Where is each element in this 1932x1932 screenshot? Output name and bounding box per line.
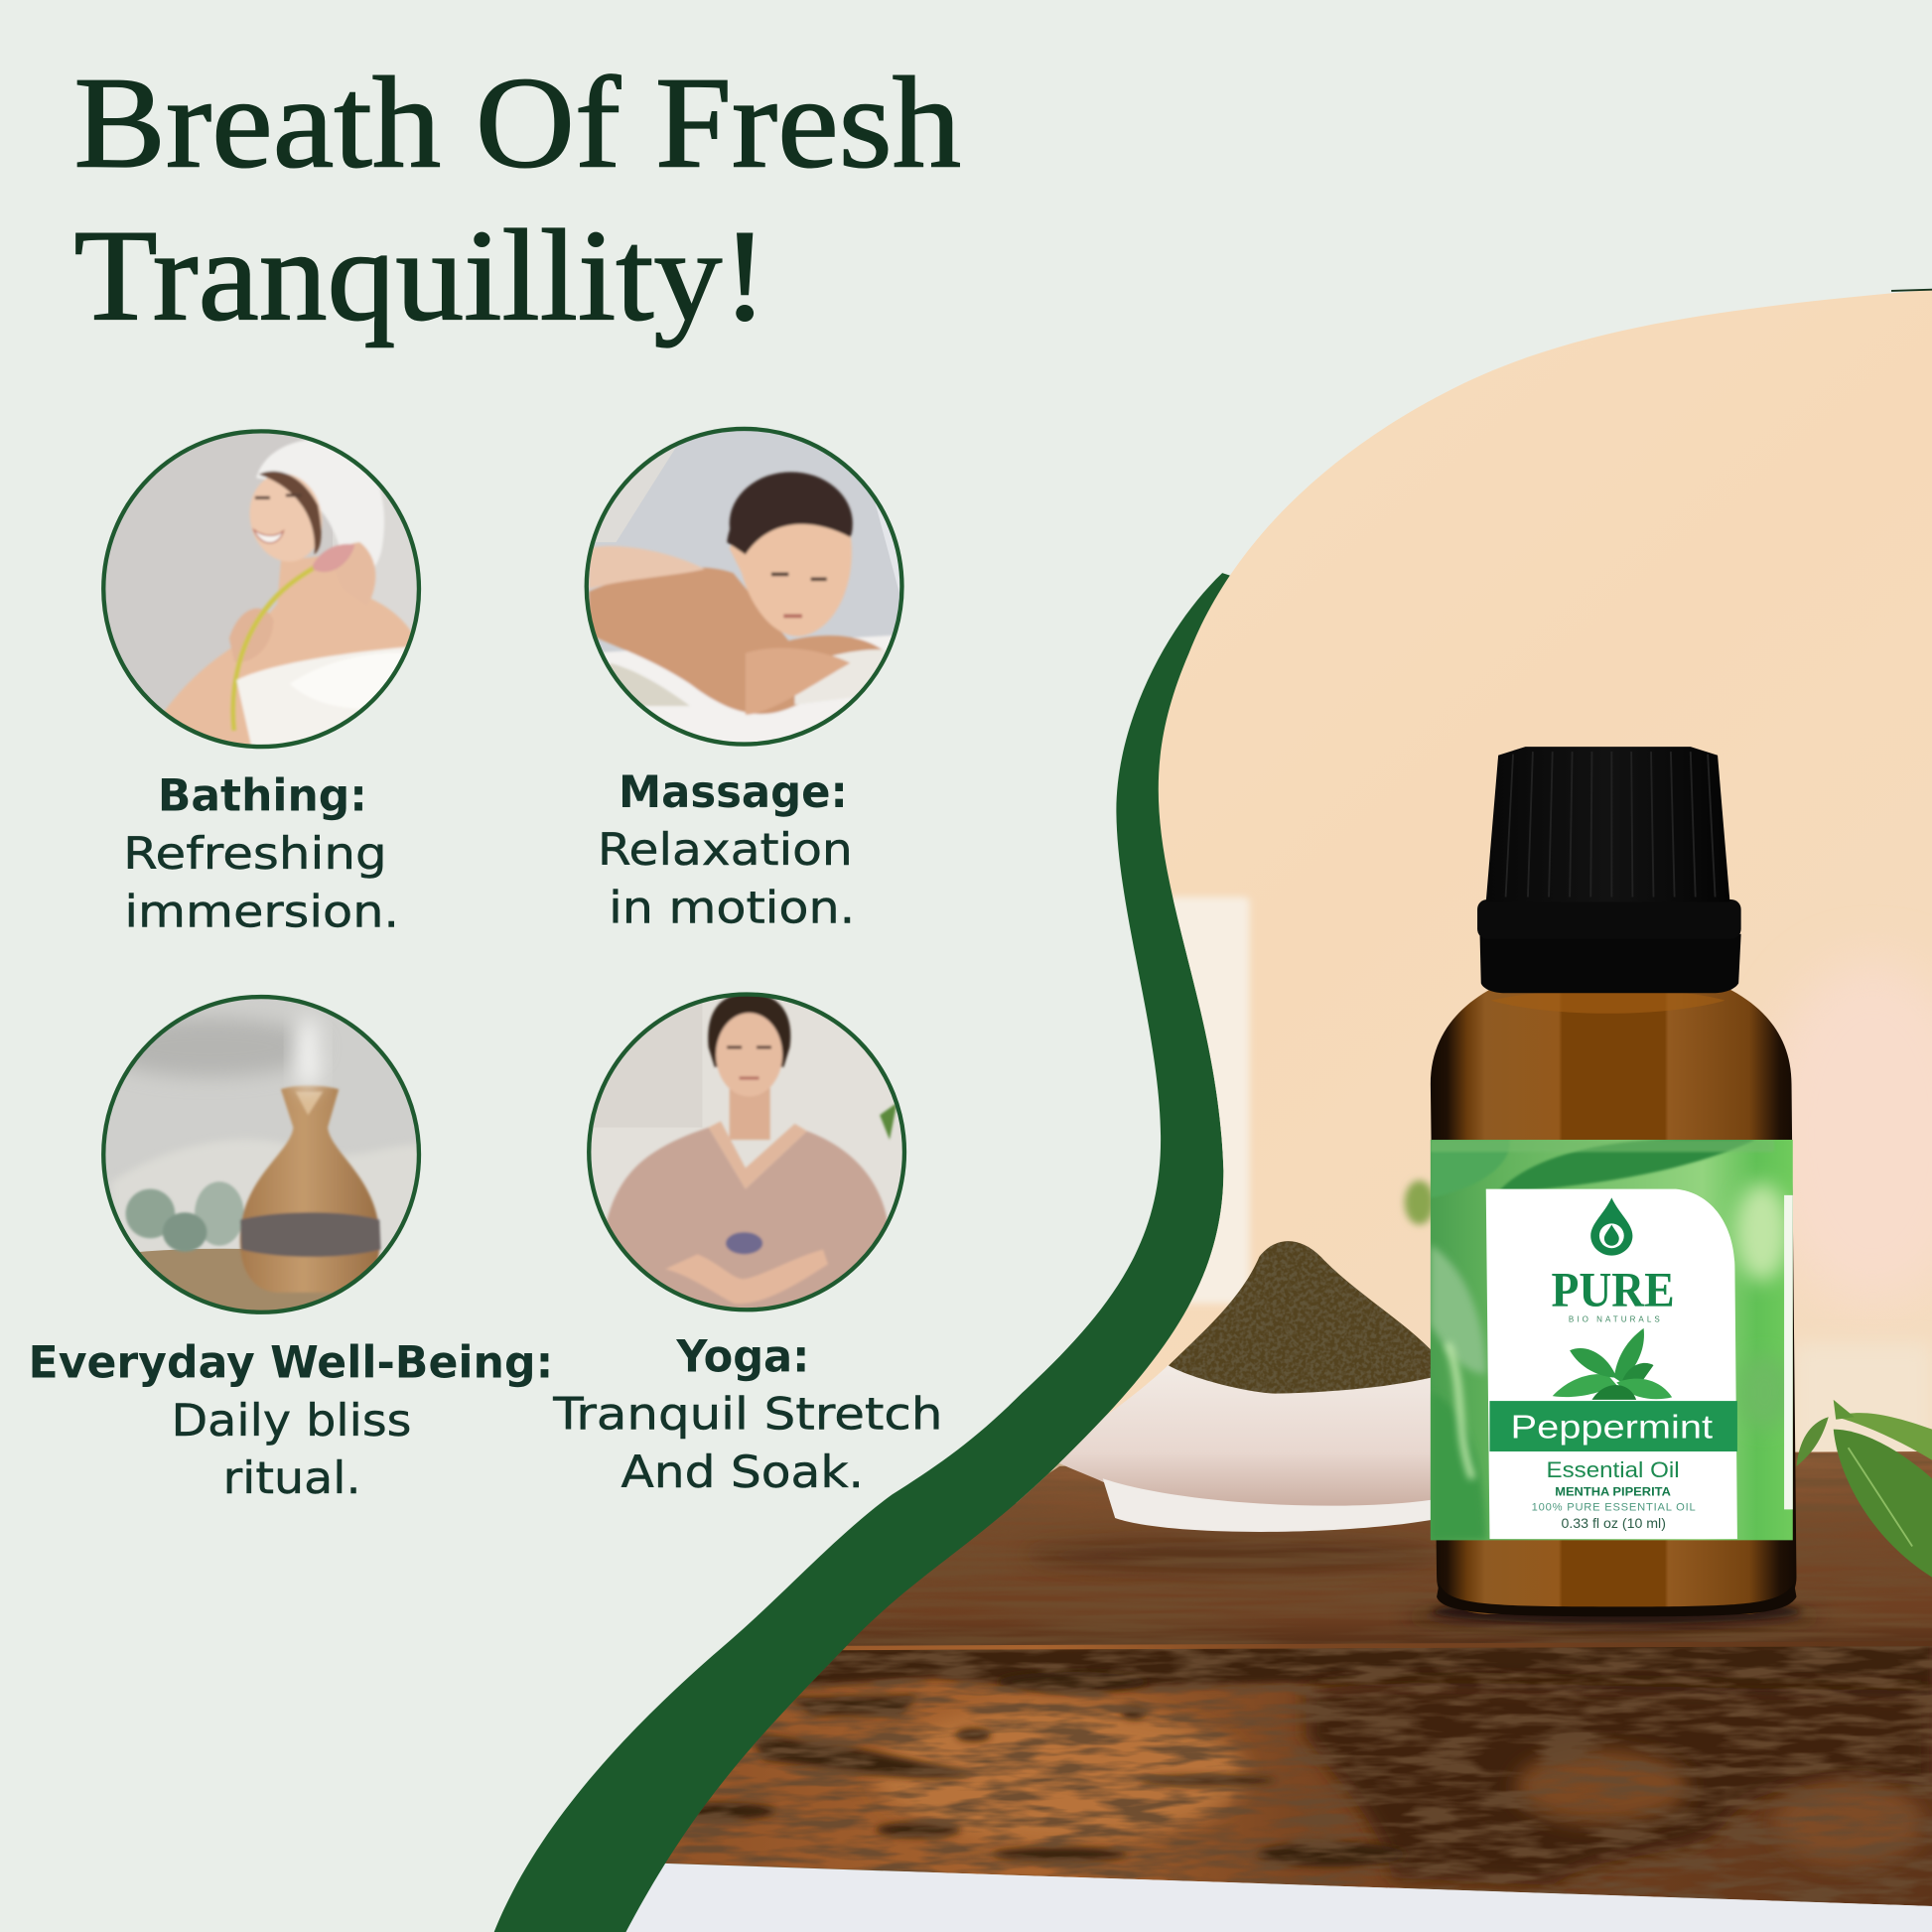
bottle shadow	[1432, 1599, 1801, 1624]
product label: BIO NATURALS	[1569, 1315, 1660, 1324]
lighter left wood	[875, 1707, 1244, 1842]
table top	[843, 1451, 1932, 1650]
panel: product photo scene	[625, 290, 1932, 1932]
white bowl with herb powder	[1059, 1241, 1431, 1532]
label text: MENTHA PIPERITA	[1555, 1486, 1671, 1499]
caption: massage: in motion.	[609, 883, 855, 934]
label text: Essential Oil	[1547, 1457, 1680, 1482]
label text: 0.33 fl oz (10 ml)	[1561, 1516, 1666, 1531]
caption: yoga: Yoga:	[675, 1330, 809, 1382]
top dark edge of the board	[804, 1646, 1932, 1695]
icon: pure logo drop	[1590, 1197, 1632, 1256]
caption: bathing: immersion.	[124, 886, 399, 937]
wall glow	[1783, 967, 1932, 1293]
caption: everyday well-being: Everyday Well-Being:	[29, 1337, 553, 1389]
circle ring	[103, 431, 419, 747]
thin dark edge at top right	[1891, 290, 1932, 291]
circle ring	[589, 995, 904, 1310]
amber glass body	[1431, 986, 1796, 1614]
logo text: PURE	[1552, 1263, 1675, 1317]
icon: mint sprig	[1553, 1328, 1672, 1400]
glass bottom dark	[1437, 1584, 1796, 1616]
title: Tranquillity!	[73, 204, 767, 347]
label text: 100% PURE ESSENTIAL OIL	[1532, 1502, 1696, 1514]
white surface below table	[617, 1863, 1932, 1932]
dark right blotches	[1307, 1684, 1932, 1885]
left dark knots	[678, 1672, 1405, 1866]
collar	[1480, 934, 1741, 993]
caption: massage: Massage:	[619, 766, 848, 818]
green leaves right of bottle	[1796, 1400, 1932, 1578]
wall lower right	[1795, 1344, 1930, 1451]
photo: woman with towel	[98, 425, 425, 752]
table front face	[617, 1641, 1932, 1911]
caption: everyday well-being: Daily bliss	[172, 1395, 412, 1447]
caption: yoga: And Soak.	[621, 1447, 864, 1498]
product label: Peppermint	[1511, 1409, 1714, 1446]
panel: bathing	[98, 425, 425, 937]
green wave band	[494, 573, 1355, 1932]
label text	[1532, 1457, 1696, 1531]
caption: massage: Relaxation	[598, 824, 853, 876]
white label panel	[1486, 1189, 1737, 1539]
photo: wooden diffuser	[98, 992, 425, 1318]
circle ring	[103, 997, 419, 1312]
panel: everyday well-being	[29, 992, 553, 1504]
photo: woman meditating	[586, 992, 911, 1318]
caption: yoga	[552, 1330, 942, 1498]
panel: massage	[579, 425, 911, 934]
title	[73, 52, 961, 347]
caption: everyday well-being: ritual.	[223, 1452, 361, 1504]
blurred leaf behind bottle	[1405, 1180, 1435, 1225]
white candle	[1169, 897, 1249, 1304]
bottle	[1431, 747, 1801, 1624]
caption: bathing	[123, 770, 399, 937]
peppermint band	[1489, 1401, 1737, 1451]
caption: bathing: Bathing:	[158, 770, 367, 822]
caption: bathing: Refreshing	[123, 828, 387, 880]
flange	[1477, 899, 1741, 939]
label foliage	[1431, 1139, 1794, 1540]
caption: yoga: Tranquil Stretch	[552, 1389, 942, 1441]
panel: yoga	[552, 992, 942, 1498]
caption: massage	[598, 766, 855, 934]
bowl foot	[1103, 1478, 1442, 1532]
herb powder pile	[1169, 1241, 1431, 1394]
circle ring	[587, 429, 901, 745]
caption: everyday well-being	[29, 1337, 553, 1504]
peach wall	[1016, 290, 1932, 1503]
photo: woman massage	[589, 431, 899, 742]
black ribbed cap	[1486, 747, 1729, 901]
product label	[1431, 1139, 1794, 1540]
title: Breath Of Fresh	[73, 52, 961, 196]
bowl body	[1044, 1365, 1442, 1511]
